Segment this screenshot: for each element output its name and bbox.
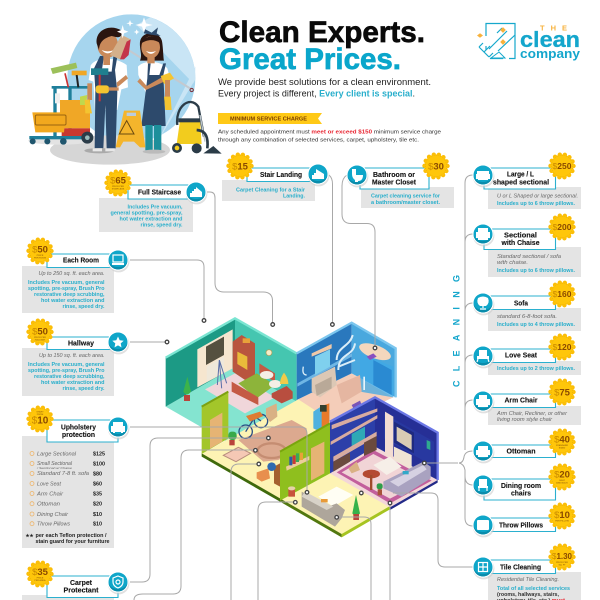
logo: the clean company [478,24,580,61]
price badge: $10 [554,510,570,521]
title [219,16,425,76]
subtitle [218,77,431,100]
card: carpet protectant: Carpet [70,578,92,587]
icon: pillow [472,514,494,537]
minimum charge text: through any combination of selected services, carpet, upholstery, tile etc. [218,138,419,144]
card: large / L shaped sectional: shaped sectional [493,178,549,186]
subtitle: We provide best solutions for a clean environment. [218,77,431,88]
card: hallway: Up to 150 sq. ft. each area. [39,353,104,359]
card: throw pillows: Throw Pillows [499,520,543,530]
card: full staircase: Full Staircase [138,188,181,196]
banner: minimum service charge: MINIMUM SERVICE CHARGE [230,116,308,122]
price badge [106,172,130,194]
room: hall [202,392,390,537]
price badge: PRICE PER [34,337,46,339]
price badge [550,466,574,488]
card: each room: Includes Pre vacuum, general [28,280,105,286]
price badge: PRICE [37,578,44,580]
card: dining room chairs: chairs [511,488,531,498]
man [84,28,128,153]
card: ottoman [472,430,574,463]
price list: Standard 7-8 ft. sofa [37,471,89,477]
connector dots [165,319,426,519]
teflon note: stain guard for your furniture [36,539,110,545]
price list [30,452,105,528]
icon: star [107,331,129,354]
card: tile cleaning: Residential Tile Cleaning. [497,577,559,583]
minimum charge text: Any scheduled appointment must meet or exceed $150 minimum service charge [218,130,441,136]
price list: $125 [93,452,105,458]
card: sectional with chaise: with Chaise [501,238,540,247]
card: tile cleaning [472,546,581,600]
card: large / L shaped sectional: Large / L [507,170,534,178]
backdrop circle [67,14,195,143]
card: hallway: restorative deep scrubbing, [34,374,105,380]
card: tile cleaning: Tile Cleaning [500,562,541,572]
card: bathroom or master closet: Bathroom or [373,170,415,179]
card: arm chair: living room style chair [497,417,553,423]
card: arm chair: Arm Chair, Recliner, or other [496,411,568,417]
price badge: $1.30 [552,552,573,561]
price list: $35 [93,492,102,498]
card: sectional with chaise: with chaise. [497,260,528,266]
price list: Throw Pillows [37,522,70,528]
card: sofa: Includes up to 4 throw pillows. [497,322,575,328]
icon: tile [472,556,494,579]
broom [110,35,193,92]
card: hallway: Includes Pre vacuum, general [28,362,105,368]
price list: $80 [93,472,102,478]
price list: $20 [93,502,102,508]
card: upholstery protection: Upholstery [61,422,97,432]
price badge: START [36,410,44,414]
card: love seat: Includes up to 2 throw pillows. [497,366,575,372]
card: stair landing: Landing. [283,194,305,200]
card: sectional with chaise [472,216,581,277]
price badge: $30 [428,162,444,172]
price list: $100 [93,462,105,468]
card: sofa: standard 6-8-foot sofa. [497,314,557,320]
price badge: $75 [554,388,571,398]
price badge: $65 [110,176,127,186]
vacuum cleaner [172,102,222,154]
price badge [28,408,52,430]
minimum charge text [218,130,441,144]
wet floor sign [116,111,145,147]
icon: stair landing [307,163,329,186]
price badge [28,320,52,344]
card: each room: hot water extraction and [41,298,105,304]
icon: stairs [185,181,207,204]
title: Clean Experts. [219,16,425,49]
card: full staircase: rinse, speed dry. [140,222,183,228]
price badge [28,240,52,262]
card: each room: rinse, speed dry. [62,304,105,310]
card: hallway: Hallway [68,338,95,348]
price badge: $200 [553,222,572,232]
icon: shield [107,571,129,594]
card: tile cleaning: Total of all selected services [497,586,570,592]
card: large / L shaped sectional: U or L Shaped or large sectional. [497,194,578,200]
teflon note: ★★ [26,533,35,538]
price list: $10 [93,512,102,518]
icon: dining chair [472,474,494,497]
price list: $60 [93,482,102,488]
price list: / Sectional w/ Chaise [36,466,72,470]
card: love seat [472,336,581,375]
card: sofa: Sofa [514,298,529,308]
card: ottoman: Ottoman [506,446,536,456]
price list: Arm Chair [36,492,64,498]
card: upholstery protection [22,408,129,548]
card: sectional with chaise: Standard sectional / sofa [497,254,561,260]
price badge [550,430,574,454]
price badge: HALLWAY [35,338,46,342]
price badge: STAIRCASE [112,188,125,190]
room: bathroom [297,323,396,427]
price badge: $50 [32,244,48,256]
card: stair landing [222,154,329,201]
price badge: FROM [37,414,43,416]
price badge: $15 [232,162,249,172]
card: bathroom or master closet [346,154,454,208]
icon: room [107,249,129,272]
logo wordmark [520,24,580,61]
sparkles [117,17,153,38]
card: dining room chairs: Dining room [501,481,541,490]
price list: Small Sectional [37,461,73,467]
card: sectional with chaise: Includes up to 6 throw pillows. [497,268,575,274]
price badge [28,562,52,586]
card: tile cleaning: (rooms, hallways, stairs, [497,592,559,598]
card: carpet protectant [22,562,129,600]
title: Great Prices. [219,43,401,76]
icon: sectional [472,164,494,187]
logo mark [478,24,515,58]
price badge: SEAT [559,479,565,482]
card: arm chair: Arm Chair [504,396,538,404]
card: love seat: Love Seat [505,350,537,360]
teflon note [26,533,110,545]
card: hallway [22,320,129,396]
room: bedroom [166,318,297,442]
price badge: PRICE PER [556,562,568,564]
card: bathroom or master closet: Master Closet [372,178,416,186]
card: hallway: spotting, pre-spray, Brush Pro [28,368,105,374]
card: upholstery protection: protection [62,430,95,439]
price badge: $160 [553,289,572,299]
cleaning cart [29,63,93,145]
price badge: $35 [32,567,49,578]
price list: Dining Chair [37,512,69,518]
icon: chair [472,345,494,368]
card: full staircase: general spotting, pre-spray, [110,210,183,216]
price list: Love Seat [37,482,61,488]
card: bathroom or master closet: a bathroom/master closet. [371,200,440,206]
room: living room [330,397,438,510]
price list: Ottoman [37,502,60,508]
price badge [550,546,574,568]
price list: Large Sectional [37,452,77,458]
icon: ottoman [472,440,494,463]
card: each room: restorative deep scrubbing, [34,292,105,298]
price badge: $10 [32,416,49,426]
card: bathroom or master closet: Carpet cleaning service for [371,194,441,200]
subtitle: Every project is different, Every client is special. [218,88,415,100]
card: each room: spotting, pre-spray, Brush Pro [28,286,105,292]
icon: chaise [472,223,494,246]
card: hallway: hot water extraction and [41,380,105,386]
vertical label: cleaning: CLEANING [452,275,462,387]
price badge: AND BACK [556,482,568,484]
card: stair landing: Stair Landing [260,170,302,179]
card: each room [22,240,129,313]
price badge: $50 [32,326,48,338]
price badge: PRICE PER [112,186,124,188]
logo wordmark: clean [520,27,580,52]
price badge: PRICE [37,255,44,257]
price badge [550,504,574,528]
card: carpet protectant: Protectant [64,586,99,594]
price badge: $40 [554,434,570,446]
card: sectional with chaise: Sectional [504,230,537,240]
price badge: $20 [554,470,570,480]
connector lines [130,175,473,600]
card: large / L shaped sectional [472,154,581,209]
woman [137,27,174,154]
price badge: STANDARD [556,444,568,447]
card: full staircase: Includes Pre vacuum, [128,204,183,210]
illustration: cleaning crew [28,14,222,165]
card: arm chair [472,380,581,425]
price badge: PER AREA [34,579,46,582]
price list: $10 [93,522,102,528]
price badge: $250 [553,161,572,171]
logo wordmark: company [520,47,580,61]
card: hallway: rinse, speed dry. [62,386,105,392]
price badge: PER ROOM [34,258,46,260]
logo wordmark: THE [540,24,567,32]
card: full staircase [99,172,207,232]
card: sofa [472,282,581,331]
card: full staircase: hot water extraction and [120,216,183,222]
price badge: SQ. FT [558,564,566,566]
banner: minimum service charge [218,113,322,124]
card: large / L shaped sectional: Includes up to 6 throw pillows. [497,201,575,207]
card: each room: Each Room [63,256,99,264]
floor shadow [28,135,170,165]
isometric house [166,318,438,537]
icon: egg chair [472,292,494,315]
card: stair landing: Carpet Cleaning for a Stair [236,187,306,193]
price badge: SIZED [559,448,566,450]
card: dining room chairs [472,466,574,500]
card: each room: Up to 250 sq. ft. each area. [38,271,104,277]
card: throw pillows [472,504,574,537]
icon: arm chair [472,390,494,413]
price badge: PER PILLOW [555,520,570,522]
icon: toilet [346,164,368,187]
teflon note: per each Teflon protection / [36,533,107,539]
icon: sofa [107,416,129,439]
price badge: $120 [553,342,572,352]
